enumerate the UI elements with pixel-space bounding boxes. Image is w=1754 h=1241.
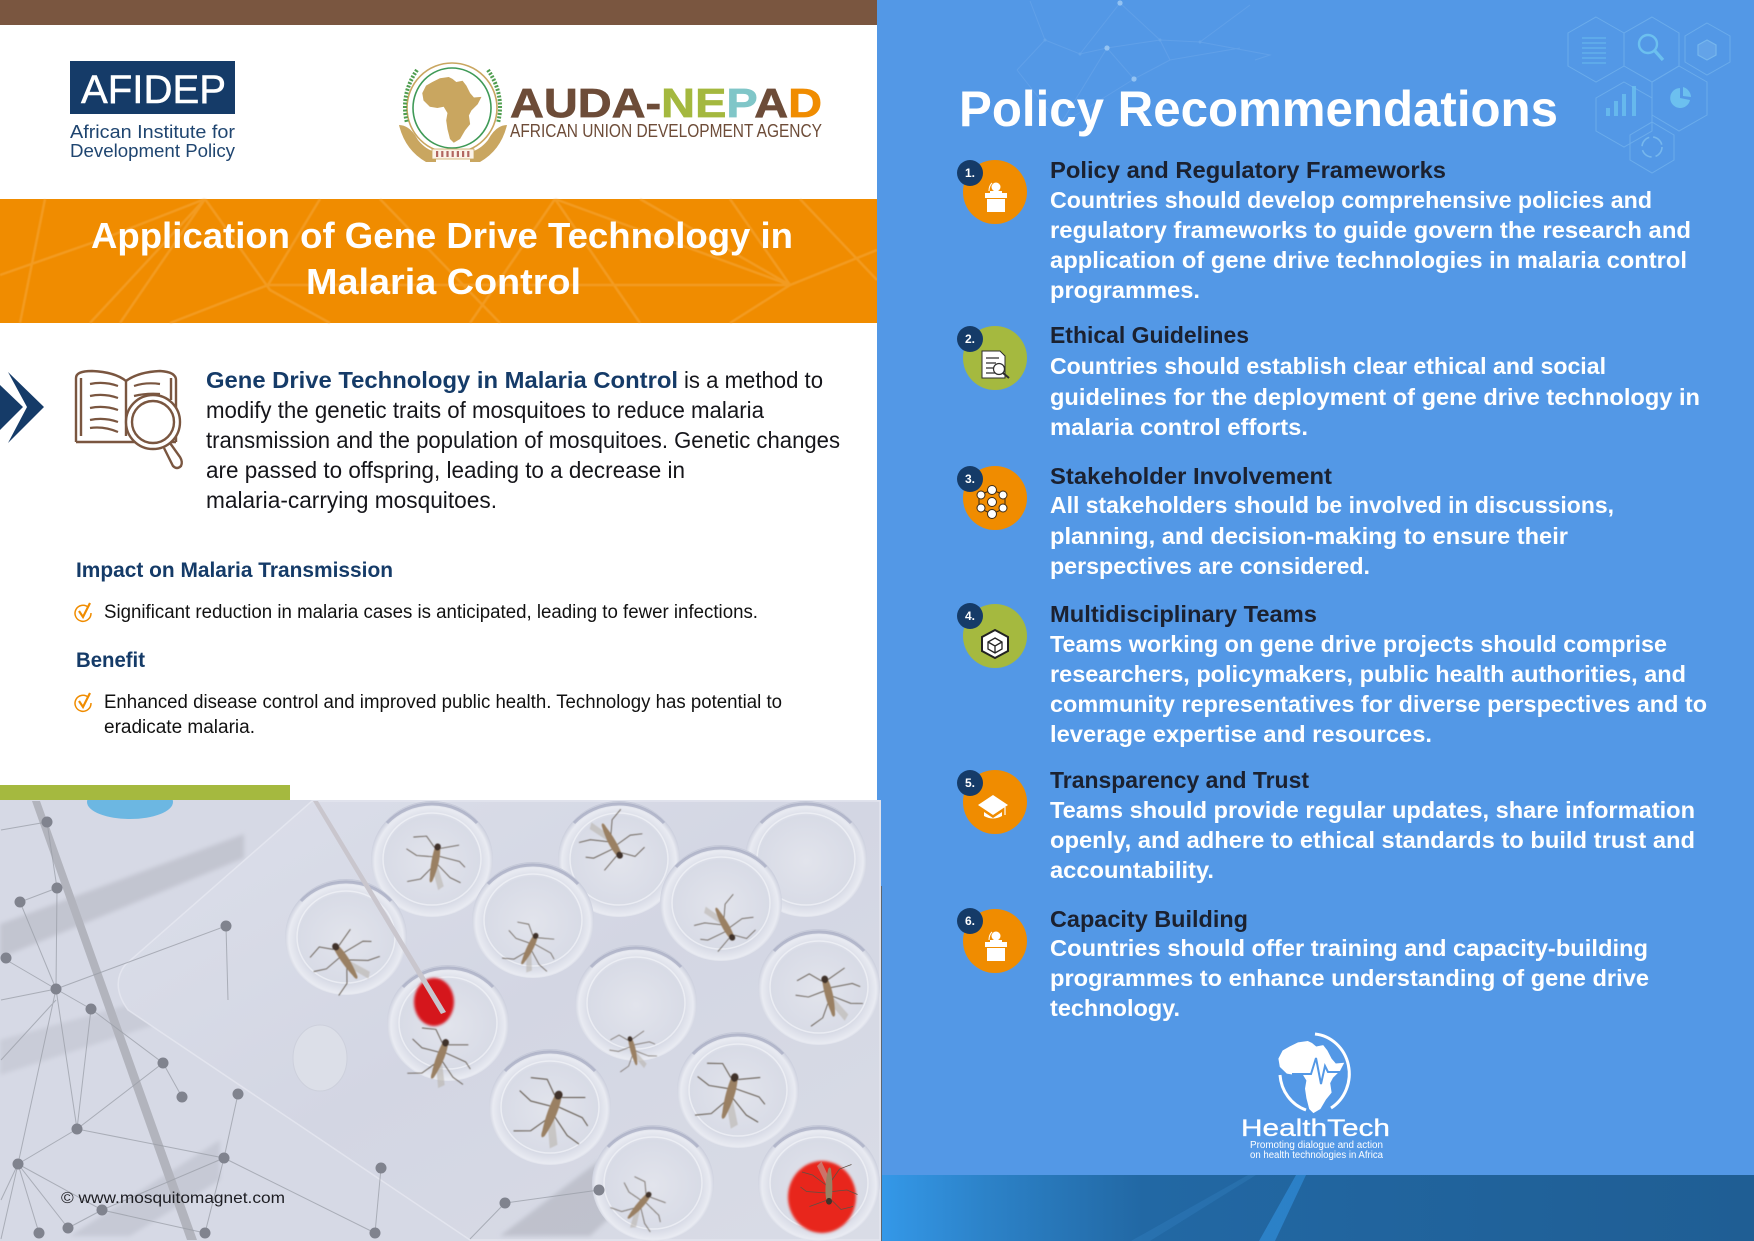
- text block: Teams working on gene drive projects should comprise: [1050, 631, 1667, 657]
- text block: technology.: [1050, 995, 1180, 1021]
- text block: [1050, 157, 1691, 303]
- icon: graduation cap: 5.: [965, 776, 975, 790]
- text block: openly, and adhere to ethical standards to build trust and: [1050, 827, 1695, 853]
- text block: Ethical Guidelines: [1050, 322, 1249, 348]
- photo credit: © www.mosquitomagnet.com: [61, 1190, 285, 1207]
- text block: application of gene drive technologies in malaria control: [1050, 247, 1687, 273]
- icon: podium: 1.: [965, 166, 975, 180]
- text block: Policy and Regulatory Frameworks: [1050, 157, 1446, 183]
- icon: stakeholder network: 3.: [965, 472, 975, 486]
- green accent bar: [0, 785, 290, 800]
- section: impact: [75, 559, 758, 623]
- title text: Malaria Control: [306, 261, 581, 302]
- icon: podium: [957, 908, 1027, 973]
- icon: check: [75, 603, 91, 621]
- text block: perspectives are considered.: [1050, 553, 1370, 579]
- recommendation 4: [957, 601, 1707, 747]
- logo: HealthTech: HealthTech: [1241, 1115, 1390, 1142]
- logo: AUDA-NEPAD: AFRICAN UNION DEVELOPMENT AGENCY: [510, 121, 822, 141]
- intro text: malaria-carrying mosquitoes.: [206, 487, 497, 513]
- icon: podium: 6.: [965, 914, 975, 928]
- logo: HealthTech: on health technologies in Africa: [1250, 1150, 1383, 1161]
- recommendation 5: [957, 767, 1695, 883]
- pipette: [313, 801, 446, 1014]
- text block: Countries should develop comprehensive policies and: [1050, 187, 1652, 213]
- icon: stakeholder network: [957, 466, 1027, 530]
- logo: HealthTech: [1241, 1034, 1390, 1161]
- logo: AFIDEP: [70, 61, 235, 161]
- recommendation 1: [957, 157, 1691, 303]
- panel: left white background: [0, 0, 877, 1241]
- text block: community representatives for diverse perspectives and to: [1050, 691, 1707, 717]
- icon cluster: tech hexagons: [1568, 17, 1730, 173]
- icon: Africa ring with pulse: [1278, 1034, 1349, 1113]
- plate: [118, 801, 880, 1240]
- intro text: are passed to offspring, leading to a decrease in: [206, 457, 685, 483]
- intro text: transmission and the population of mosquitoes. Genetic changes: [206, 427, 840, 453]
- icon: hex cube: 4.: [965, 609, 975, 623]
- icon: open book with magnifier: [76, 371, 182, 468]
- mosquitoes: [304, 803, 868, 1240]
- text block: [1050, 767, 1695, 883]
- icon: navy chevrons: [0, 372, 44, 443]
- text block: [1050, 322, 1700, 440]
- text block: Countries should establish clear ethical and social: [1050, 353, 1606, 379]
- intro text: modify the genetic traits of mosquitoes to reduce malaria: [206, 397, 765, 423]
- title text: [91, 215, 793, 302]
- section: benefit: [75, 649, 782, 738]
- recommendation 6: [957, 906, 1649, 1021]
- recommendation 3: [957, 463, 1614, 579]
- text block: programmes to enhance understanding of gene drive: [1050, 965, 1649, 991]
- icon: podium: [957, 160, 1027, 224]
- text block: [1050, 601, 1707, 747]
- logo: AUDA-NEPAD: [399, 63, 822, 162]
- faint network bright dots: [1104, 0, 1137, 82]
- text block: Transparency and Trust: [1050, 767, 1309, 793]
- intro text: Gene Drive Technology in Malaria Control: [206, 367, 678, 393]
- icon: graduation cap: [957, 770, 1027, 834]
- icon: document search: 2.: [965, 332, 975, 346]
- text block: Multidisciplinary Teams: [1050, 601, 1317, 627]
- text block: regulatory frameworks to guide govern the research and: [1050, 217, 1691, 243]
- heading: Policy Recommendations: Policy Recommendations: [959, 81, 1558, 137]
- text block: Countries should offer training and capacity-building: [1050, 935, 1648, 961]
- photo: mosquitoes in well plate: [0, 785, 881, 1241]
- bullet text: Significant reduction in malaria cases is anticipated, leading to fewer infections.: [104, 602, 758, 623]
- logo: AUDA-NEPAD: AUDA- NEPAD: [510, 80, 822, 126]
- text block: [1050, 463, 1614, 579]
- text block: malaria control efforts.: [1050, 414, 1308, 440]
- text block: researchers, policymakers, public health authorities, and: [1050, 661, 1686, 687]
- network overlay: [0, 816, 604, 1239]
- logo: AFIDEP: Development Policy: [70, 141, 235, 161]
- logo: AFIDEP: AFIDEP: [81, 68, 226, 112]
- bottom band: [882, 1175, 1754, 1241]
- banner: title: [0, 199, 877, 323]
- text block: planning, and decision-making to ensure their: [1050, 523, 1568, 549]
- recommendation 2: [957, 322, 1700, 440]
- heading: benefit: Benefit: [76, 649, 145, 672]
- text block: Stakeholder Involvement: [1050, 463, 1332, 489]
- title text: Application of Gene Drive Technology in: [91, 215, 793, 256]
- logo: AFIDEP: African Institute for: [70, 122, 235, 142]
- bullet text: eradicate malaria.: [104, 717, 255, 738]
- bullet text: Enhanced disease control and improved public health. Technology has potential to: [104, 692, 782, 713]
- text block: guidelines for the deployment of gene drive technology in: [1050, 384, 1700, 410]
- text block: leverage expertise and resources.: [1050, 721, 1432, 747]
- text block: Capacity Building: [1050, 906, 1248, 932]
- logo: HealthTech: Promoting dialogue and action: [1250, 1140, 1383, 1151]
- red droplets: [414, 978, 454, 1026]
- bullet text: [104, 692, 782, 738]
- text block: Teams should provide regular updates, share information: [1050, 797, 1695, 823]
- icon: check: [75, 693, 91, 711]
- icon: document search: [957, 326, 1027, 390]
- text block: [1050, 906, 1649, 1021]
- text block: accountability.: [1050, 857, 1214, 883]
- wells: [285, 801, 881, 1241]
- brown top bar: [0, 0, 877, 25]
- intro text: is a method to: [684, 367, 823, 393]
- faint network pattern: [1017, 1, 1270, 125]
- panel: right blue background: [877, 0, 1754, 1241]
- intro text: [206, 367, 840, 513]
- icon: African Union emblem: [399, 63, 507, 162]
- icon: hex cube: [957, 603, 1027, 668]
- text block: programmes.: [1050, 277, 1200, 303]
- heading: impact: Impact on Malaria Transmission: [76, 559, 393, 582]
- text block: All stakeholders should be involved in discussions,: [1050, 492, 1614, 518]
